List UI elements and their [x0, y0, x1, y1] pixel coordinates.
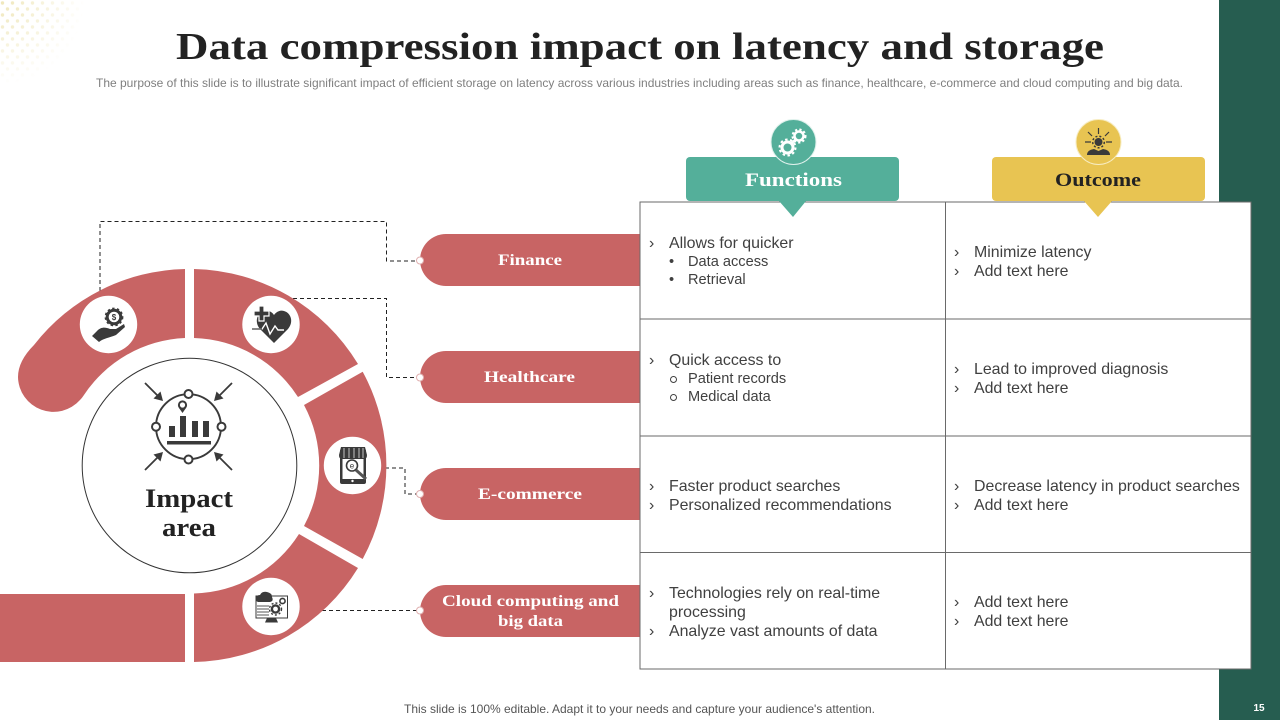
cell: e-commerce functions: › — [649, 478, 654, 495]
cell: healthcare outcome: Add text here — [974, 380, 1069, 397]
icon: gears and wrench — [771, 120, 816, 164]
cell: e-commerce outcome: › — [954, 478, 959, 495]
cell: finance functions: Allows for quicker — [669, 235, 794, 252]
cell: healthcare outcome: › — [954, 380, 959, 397]
pill: cloud computing and big data: big data — [498, 613, 563, 630]
pill: cloud computing and big data: Cloud computing and — [442, 593, 619, 610]
cell: e-commerce outcome: › — [954, 497, 959, 514]
icon: finance hand and gear — [80, 296, 137, 353]
icon: finance hand and gear: $ — [112, 313, 117, 322]
icon: idea person — [1076, 120, 1121, 164]
icon: healthcare heart — [242, 296, 300, 353]
cell: cloud outcome — [954, 594, 1069, 630]
cell: finance outcome: Add text here — [974, 263, 1069, 280]
cell: finance outcome: › — [954, 263, 959, 280]
cell: finance functions: › — [649, 235, 654, 252]
cell: cloud functions: › — [649, 585, 654, 602]
segment: e-commerce — [304, 372, 386, 559]
cell: e-commerce outcome: Add text here — [974, 497, 1069, 514]
right sidebar — [1219, 0, 1280, 720]
cell: e-commerce outcome — [954, 478, 1240, 514]
subtitle: The purpose of this slide is to illustrate significant impact of efficient storage on latency across various industries including areas such as finance, healthcare, e-commerce and cloud computing and big data. — [96, 76, 1183, 90]
connector: cloud computing — [322, 610, 418, 612]
pill: e-commerce: E-commerce — [478, 486, 582, 503]
cell: cloud functions: Analyze vast amounts of data — [669, 623, 878, 640]
pill: healthcare — [416, 351, 640, 403]
pill: cloud computing and big data — [416, 585, 640, 637]
icon: cloud computing monitor — [242, 578, 300, 635]
cell: cloud functions: › — [649, 623, 654, 640]
cell: healthcare outcome: › — [954, 361, 959, 378]
cell: healthcare functions: Quick access to — [669, 352, 781, 369]
pill: e-commerce — [416, 468, 640, 520]
cell: healthcare functions — [649, 352, 786, 405]
page number: 15 — [1253, 703, 1265, 714]
cell: e-commerce outcome: Decrease latency in product searches — [974, 478, 1240, 495]
segment: cloud computing — [194, 534, 358, 662]
icon: e-commerce phone — [324, 437, 381, 494]
icon: e-commerce phone: e — [350, 462, 355, 470]
cell: finance functions: Data access — [688, 254, 768, 270]
cell: cloud functions: processing — [669, 604, 746, 621]
cell: e-commerce functions: Personalized recommendations — [669, 497, 892, 514]
cell: finance outcome: › — [954, 244, 959, 261]
decorative dot pattern — [0, 1, 74, 75]
header: outcome: Outcome — [1055, 171, 1141, 191]
connector: healthcare — [293, 298, 418, 378]
connector: e-commerce — [385, 468, 418, 494]
cell: e-commerce functions — [649, 478, 892, 514]
cell: finance functions: Retrieval — [688, 272, 746, 288]
radial diagram — [0, 269, 386, 662]
cell: finance outcome: Minimize latency — [974, 244, 1092, 261]
pill: finance: Finance — [498, 252, 562, 269]
label: impact area — [145, 484, 233, 542]
label: impact area: Impact — [145, 484, 233, 513]
footer note: This slide is 100% editable. Adapt it to your needs and capture your audience's attention. — [404, 702, 875, 716]
cell: finance functions: • — [669, 272, 674, 288]
cell: e-commerce functions: Faster product searches — [669, 478, 840, 495]
inner circle — [82, 358, 297, 573]
cell: cloud outcome: › — [954, 594, 959, 611]
pill: healthcare: Healthcare — [484, 369, 575, 386]
cell: healthcare outcome: Lead to improved diagnosis — [974, 361, 1168, 378]
header: outcome — [992, 120, 1205, 217]
segment: bottom bar — [0, 594, 185, 662]
pill: finance — [416, 234, 640, 286]
segment: healthcare — [194, 269, 358, 397]
cell: cloud functions: Technologies rely on real-time — [669, 585, 880, 602]
table grid — [640, 202, 1251, 669]
cell: finance functions — [649, 235, 794, 288]
icon: impact chart — [145, 383, 232, 470]
label: impact area: area — [162, 513, 216, 542]
connector: finance — [100, 222, 418, 291]
header: functions — [686, 120, 899, 217]
cell: finance functions: • — [669, 254, 674, 270]
cell: healthcare functions: › — [649, 352, 654, 369]
cell: healthcare outcome — [954, 361, 1168, 397]
cell: e-commerce functions: › — [649, 497, 654, 514]
cell: healthcare functions: Medical data — [688, 389, 772, 405]
cell: cloud functions — [649, 585, 880, 640]
cell: finance outcome — [954, 244, 1092, 280]
cell: healthcare functions: Patient records — [688, 371, 786, 387]
header: functions: Functions — [745, 171, 842, 191]
cell: cloud outcome: Add text here — [974, 613, 1069, 630]
cell: cloud outcome: Add text here — [974, 594, 1069, 611]
segment: finance — [18, 269, 185, 412]
title: Data compression impact on latency and storage — [176, 26, 1104, 68]
cell: cloud outcome: › — [954, 613, 959, 630]
